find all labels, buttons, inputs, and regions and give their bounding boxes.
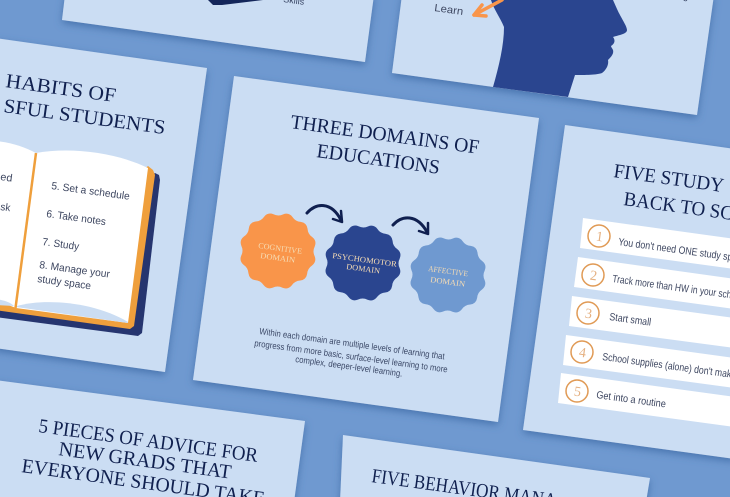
row 4: 4 <box>578 346 587 361</box>
heading: study tips title: FIVE STUDY <box>612 160 725 197</box>
icon: affective domain blob <box>405 232 491 318</box>
text: book items: study space <box>37 273 92 292</box>
text: book items <box>0 171 131 292</box>
heading: habits title <box>2 70 167 139</box>
icon: open book <box>0 141 160 336</box>
label: affective domain <box>428 264 469 289</box>
arrow: psychomotor to affective <box>393 218 428 234</box>
row 3: 3 <box>584 307 593 322</box>
row 2: 2 <box>589 269 598 284</box>
text: book items: 8. Manage your <box>39 259 111 281</box>
heading: advice title: NEW GRADS THAT <box>57 438 233 484</box>
label: affective domain: AFFECTIVE <box>428 264 469 278</box>
heading: three domains title: EDUCATIONS <box>315 140 441 179</box>
arrow: cognitive to psychomotor <box>307 206 342 222</box>
row 3: Start small <box>609 311 652 329</box>
icon: cropped dark shape <box>208 0 263 5</box>
heading: three domains title: THREE DOMAINS OF <box>289 111 481 159</box>
icon: orange arrow <box>474 0 502 16</box>
row 5 <box>558 373 730 427</box>
label: affective domain: DOMAIN <box>430 275 466 289</box>
heading: advice title: 5 PIECES OF ADVICE FOR <box>37 415 260 467</box>
label: psychomotor domain: DOMAIN <box>346 262 381 276</box>
row 1: 1 <box>595 230 604 245</box>
icon: psychomotor domain blob <box>320 220 406 306</box>
row 5: Get into a routine <box>596 389 667 410</box>
label: cognitive domain: DOMAIN <box>260 251 296 265</box>
row 3 <box>569 296 730 348</box>
label: psychomotor domain: PSYCHOMOTOR <box>332 251 398 269</box>
icon: cognitive domain blob <box>235 208 321 294</box>
panel: three domains card <box>193 76 539 422</box>
panel: top left card <box>62 0 374 62</box>
label: cognitive domain <box>258 241 303 265</box>
panel: habits card <box>0 38 207 372</box>
text: learn label: Learn <box>434 2 464 18</box>
text: book items: 6. Take notes <box>46 208 107 228</box>
text: domains description <box>254 326 448 379</box>
panel: advice card <box>0 380 305 497</box>
panel: behavior card <box>340 435 650 497</box>
text: domains description: progress from more basic, surface-level learning to more <box>254 338 448 374</box>
heading: advice title <box>20 415 266 497</box>
row 4 <box>563 335 730 388</box>
text: book items: 5. Set a schedule <box>51 180 131 203</box>
panel: top right card <box>392 0 714 115</box>
heading: study tips title <box>612 160 730 225</box>
heading: habits title: HABITS OF <box>4 70 117 107</box>
label: psychomotor domain <box>332 251 398 276</box>
row 5: 5 <box>573 385 582 400</box>
row 1 <box>580 218 730 269</box>
heading: habits title: SFUL STUDENTS <box>2 95 167 139</box>
text: domains description: Within each domain are multiple levels of learning that <box>259 326 446 361</box>
text: domains description: complex, deeper-level learning. <box>295 354 403 379</box>
row 2 <box>574 257 730 309</box>
icon: head silhouette <box>491 0 627 97</box>
panel: study tips card <box>523 125 730 459</box>
text: book items: 7. Study <box>42 236 81 253</box>
label: cognitive domain: COGNITIVE <box>258 241 303 256</box>
